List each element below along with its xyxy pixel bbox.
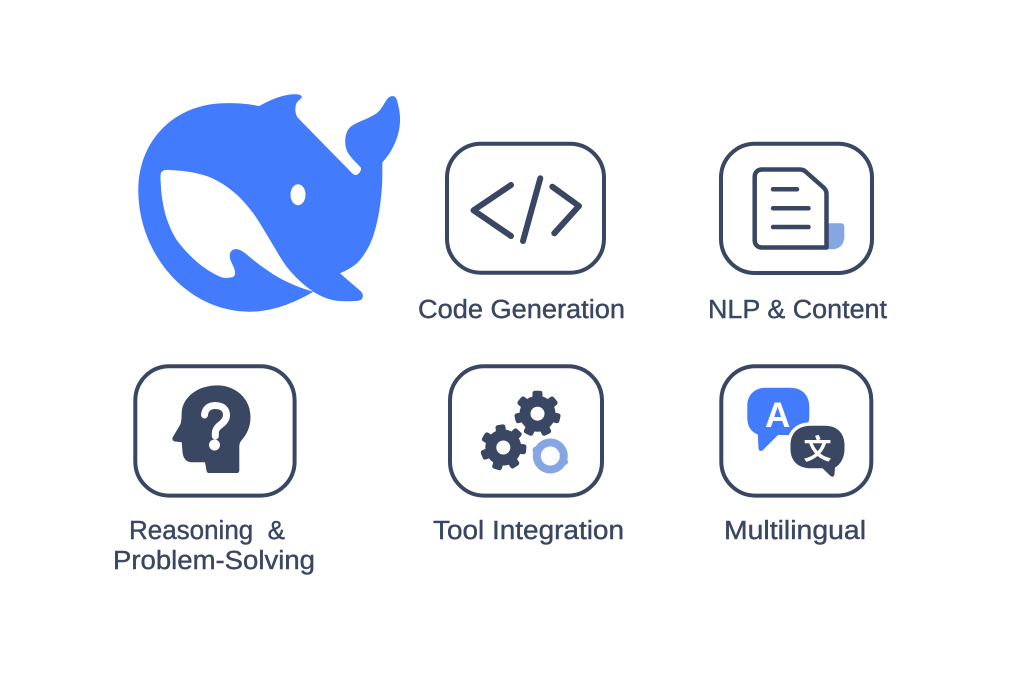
- label: reasoning line 2: Problem-Solving: [113, 547, 315, 575]
- icon: dark speech bubble: 文: [803, 434, 832, 465]
- card: code generation: [447, 144, 604, 273]
- label: reasoning line 1: Reasoning &: [129, 517, 285, 545]
- icon: lower gear: [480, 424, 527, 471]
- card: nlp and content: [721, 144, 872, 273]
- icon: head with question mark: [172, 385, 250, 473]
- whale logo: [138, 94, 400, 312]
- label: multilingual: Multilingual: [724, 517, 866, 545]
- label: nlp and content: NLP & Content: [708, 296, 887, 324]
- label: code generation: Code Generation: [418, 296, 625, 324]
- icon: document: [755, 170, 844, 249]
- label: tool integration: Tool Integration: [433, 517, 624, 545]
- card: reasoning: [135, 366, 295, 496]
- whale eye: [290, 184, 306, 205]
- card: multilingual: [721, 366, 871, 496]
- whale belly cutout: [160, 170, 313, 292]
- icon: blue speech bubble: [747, 388, 809, 451]
- icon: blue speech bubble: A: [765, 396, 790, 435]
- icon: blue ring: [532, 442, 568, 470]
- card: tool integration: [450, 366, 602, 496]
- icon: code brackets: [474, 178, 579, 241]
- icon: upper gear: [514, 391, 561, 437]
- icon: dark speech bubble: [790, 426, 844, 477]
